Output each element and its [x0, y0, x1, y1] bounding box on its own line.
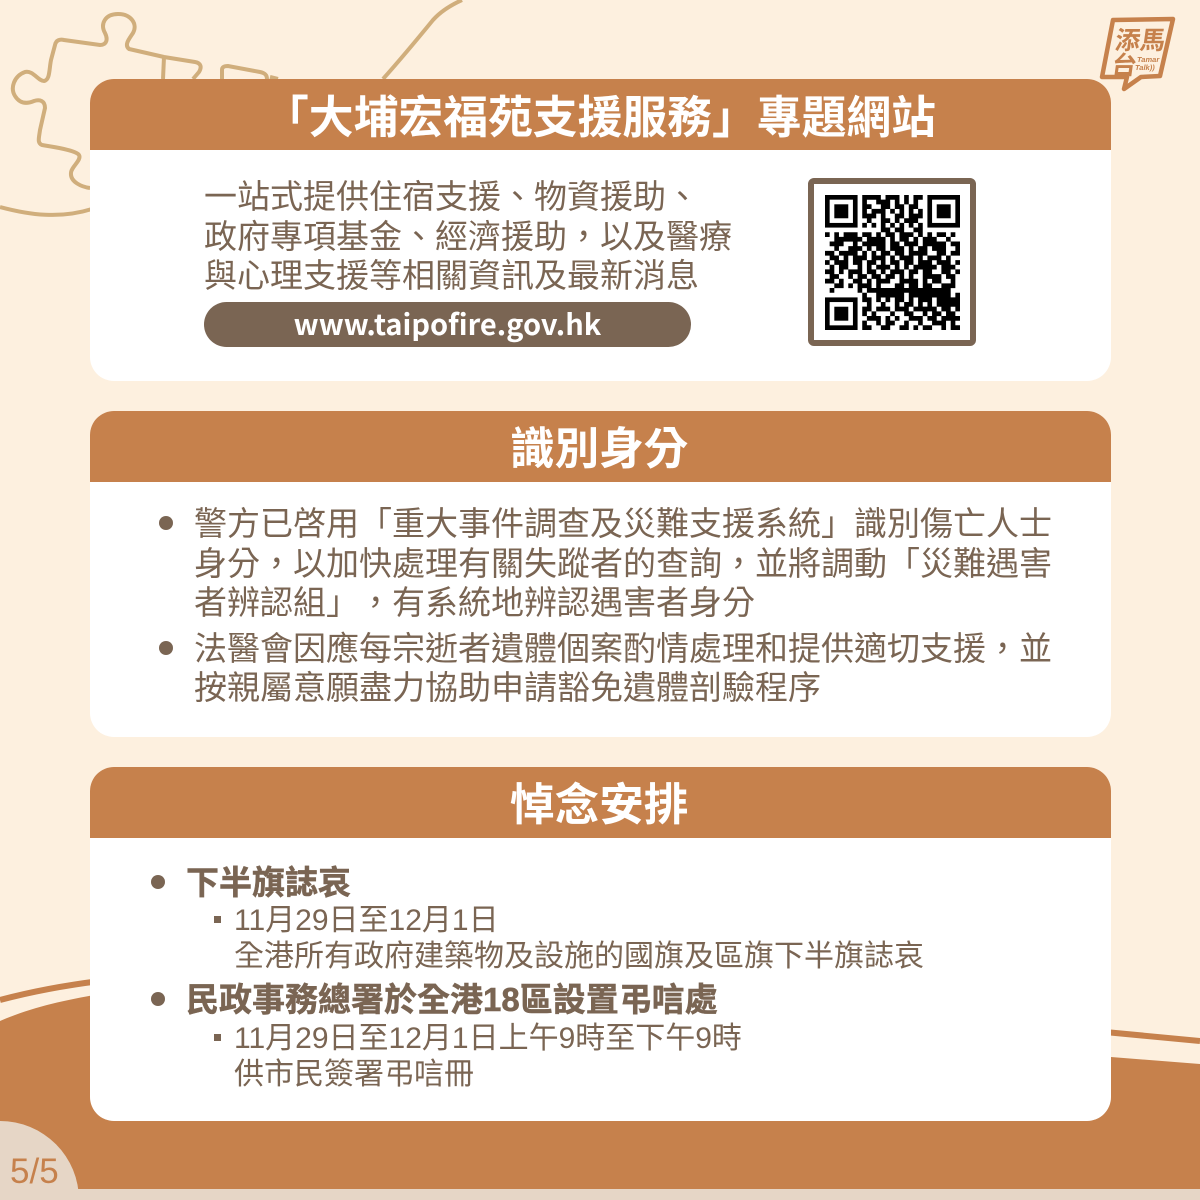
- heading: identification: [90, 411, 1111, 482]
- text block: website description: 政府專項基金、經濟援助，以及醫療: [204, 218, 732, 255]
- text block: website description: 一站式提供住宿支援、物資援助、: [204, 178, 699, 215]
- logo: Tamar Talk speech bubble: Tamar: [1137, 55, 1160, 64]
- bullet: police system: [159, 505, 1052, 621]
- website address pill: [204, 302, 691, 347]
- page number badge: [0, 1121, 79, 1200]
- bullet: police system: 警方已啓用「重大事件調查及災難支援系統」識別傷亡人士: [194, 505, 1052, 542]
- item: condolence points: 供市民簽署弔唁冊: [234, 1058, 474, 1091]
- bullet: police system: 者辨認組」，有系統地辨認遇害者身分: [194, 584, 755, 621]
- QR code: [808, 178, 976, 346]
- website address pill: www.taipofire.gov.hk: [294, 302, 601, 344]
- text block: website description: [204, 178, 732, 294]
- logo: Tamar Talk speech bubble: [1100, 16, 1176, 92]
- logo: Tamar Talk speech bubble: Talk)): [1135, 63, 1155, 72]
- item: flags at half-mast: 下半旗誌哀: [186, 864, 351, 901]
- heading: identification: 識別身分: [510, 425, 688, 474]
- item: condolence points: 民政事務總署於全港18區設置弔唁處: [186, 981, 718, 1018]
- logo: Tamar Talk speech bubble: 添馬: [1113, 27, 1167, 55]
- item: flags at half-mast: 全港所有政府建築物及設施的國旗及區旗下半旗誌哀: [234, 940, 924, 973]
- page number: 5/5: [10, 1152, 59, 1191]
- panel: dedicated website: [90, 79, 1111, 381]
- heading: memorial arrangements: [90, 767, 1111, 838]
- bullet: forensic support: 按親屬意願盡力協助申請豁免遺體剖驗程序: [194, 669, 821, 706]
- item: flags at half-mast: [151, 864, 924, 973]
- logo: Tamar Talk speech bubble: 台: [1110, 51, 1139, 80]
- bullet: forensic support: 法醫會因應每宗逝者遺體個案酌情處理和提供適切支援，並: [194, 630, 1052, 667]
- bullet: police system: 身分，以加快處理有關失蹤者的查詢，並將調動「災難遇害: [194, 545, 1052, 582]
- heading: website panel: 「大埔宏福苑支援服務」專題網站: [264, 93, 936, 143]
- panel: memorial arrangements: [90, 767, 1111, 1121]
- panel: identification: [90, 411, 1111, 737]
- text block: website description: 與心理支援等相關資訊及最新消息: [204, 257, 699, 294]
- heading: memorial arrangements: 悼念安排: [510, 781, 688, 830]
- bullet: forensic support: [159, 630, 1052, 706]
- item: flags at half-mast: 11月29日至12月1日: [234, 904, 499, 937]
- heading: website panel: [90, 79, 1111, 150]
- item: condolence points: [151, 981, 742, 1091]
- item: condolence points: 11月29日至12月1日上午9時至下午9時: [234, 1022, 742, 1055]
